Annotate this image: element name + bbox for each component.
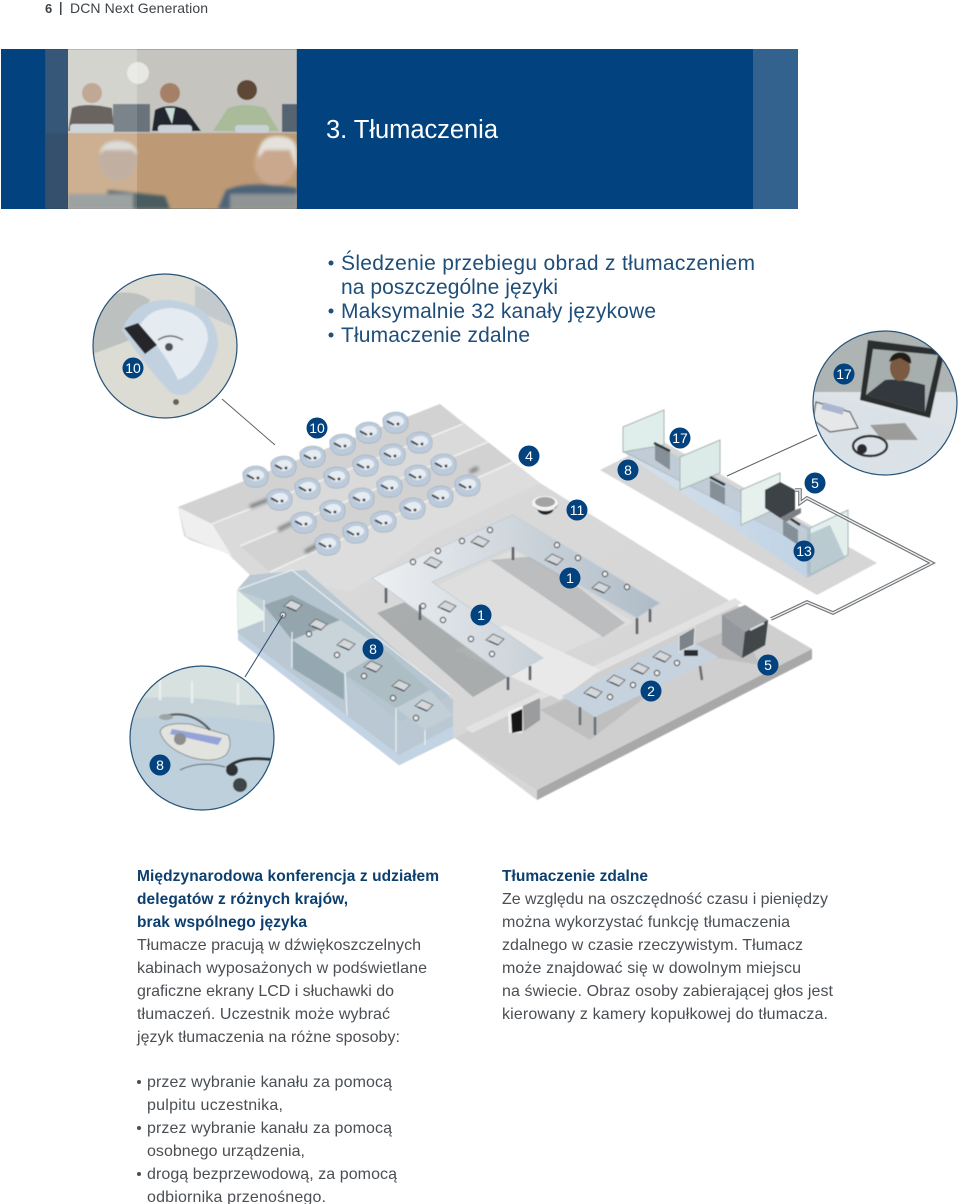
text block: international conference: kabinach wyposażonych w podświetlane bbox=[137, 960, 427, 977]
interpreter booths, left front bbox=[237, 570, 453, 765]
chair rows bbox=[243, 412, 480, 555]
list: ways of selecting language: przez wybranie kanału za pomocą bbox=[147, 1074, 392, 1091]
door / network equipment bbox=[508, 698, 540, 733]
feature bullet list: Śledzenie przebiegu obrad z tłumaczeniem bbox=[341, 251, 755, 275]
text block: remote interpreting: Tłumaczenie zdalne bbox=[502, 868, 648, 885]
central unit rack bbox=[722, 605, 768, 658]
callout line: chair bbox=[222, 399, 275, 445]
number badges: 10 bbox=[309, 420, 325, 436]
text block: remote interpreting: zdalnego w czasie rzeczywistym. Tłumacz bbox=[502, 937, 803, 954]
text block: international conference bbox=[136, 868, 439, 1046]
number badges: 2 bbox=[647, 683, 655, 699]
remote interpreting booth row bbox=[600, 410, 877, 595]
number badges: 11 bbox=[570, 502, 584, 518]
U-shaped delegate table bbox=[372, 515, 660, 690]
text block: international conference: delegatów z różnych krajów, bbox=[137, 891, 348, 908]
number badges: 1 bbox=[566, 570, 574, 586]
banner bbox=[1, 49, 798, 209]
list: ways of selecting language bbox=[137, 1074, 397, 1204]
circle detail: screen with remote interpreter bbox=[810, 330, 960, 480]
text block: remote interpreting: na świecie. Obraz osoby zabierającej głos jest bbox=[502, 983, 834, 1000]
page header: 6 bbox=[45, 1, 52, 16]
feature bullet list: Tłumaczenie zdalne bbox=[341, 324, 530, 347]
circle detail: interpreter desk bbox=[125, 665, 280, 815]
number badges: 8 bbox=[156, 757, 164, 773]
number badges: 17 bbox=[672, 430, 688, 446]
text block: remote interpreting: kierowany z kamery kopułkowej do tłumacza. bbox=[502, 1006, 828, 1023]
text block: international conference: brak wspólnego języka bbox=[137, 914, 307, 931]
number badges bbox=[122, 358, 854, 776]
feature bullet list bbox=[328, 251, 755, 347]
banner photo: interpreters at desk bbox=[45, 49, 297, 209]
text block: remote interpreting: może znajdować się w dowolnym miejscu bbox=[502, 960, 801, 977]
number badges: 10 bbox=[125, 360, 141, 376]
text block: international conference: Międzynarodowa konferencja z udziałem bbox=[137, 868, 439, 885]
dome camera bbox=[532, 496, 558, 514]
number badges: 5 bbox=[811, 475, 819, 491]
cabling bbox=[771, 490, 932, 619]
feature bullet list: na poszczególne języki bbox=[341, 276, 558, 299]
text block: remote interpreting: Ze względu na oszczędność czasu i pieniędzy bbox=[502, 891, 828, 908]
text block: remote interpreting bbox=[502, 868, 834, 1023]
text block: international conference: tłumaczeń. Uczestnik może wybrać bbox=[137, 1006, 390, 1023]
callout line: booth desk bbox=[245, 615, 283, 677]
number badges: 5 bbox=[764, 657, 772, 673]
text block: international conference: Tłumacze pracują w dźwiękoszczelnych bbox=[137, 937, 421, 954]
text block: international conference: język tłumaczenia na różne sposoby: bbox=[136, 1029, 400, 1046]
banner title: 3. Tłumaczenia bbox=[326, 116, 499, 144]
number badges: 17 bbox=[836, 366, 852, 382]
isometric conference room diagram bbox=[178, 404, 932, 800]
number badges: 13 bbox=[796, 543, 812, 559]
callout line: remote booth bbox=[727, 435, 817, 476]
number badges: 8 bbox=[369, 641, 377, 657]
number badges: 8 bbox=[624, 462, 632, 478]
room floor and terraces bbox=[178, 404, 812, 800]
circle detail: delegate chair bbox=[90, 270, 240, 420]
page header: DCN Next Generation bbox=[70, 0, 208, 16]
text block: international conference: graficzne ekrany LCD i słuchawki do bbox=[137, 983, 394, 1000]
list: ways of selecting language: przez wybranie kanału za pomocą bbox=[147, 1120, 392, 1137]
text block: remote interpreting: można wykorzystać funkcję tłumaczenia bbox=[502, 914, 790, 931]
list: ways of selecting language: pulpitu uczestnika, bbox=[147, 1097, 283, 1114]
number badges: 1 bbox=[477, 607, 485, 623]
technician table bbox=[562, 627, 718, 735]
feature bullet list: Maksymalnie 32 kanały językowe bbox=[341, 300, 656, 323]
number badges: 4 bbox=[525, 448, 533, 464]
list: ways of selecting language: osobnego urządzenia, bbox=[147, 1143, 305, 1160]
list: ways of selecting language: drogą bezprzewodową, za pomocą bbox=[147, 1166, 397, 1183]
